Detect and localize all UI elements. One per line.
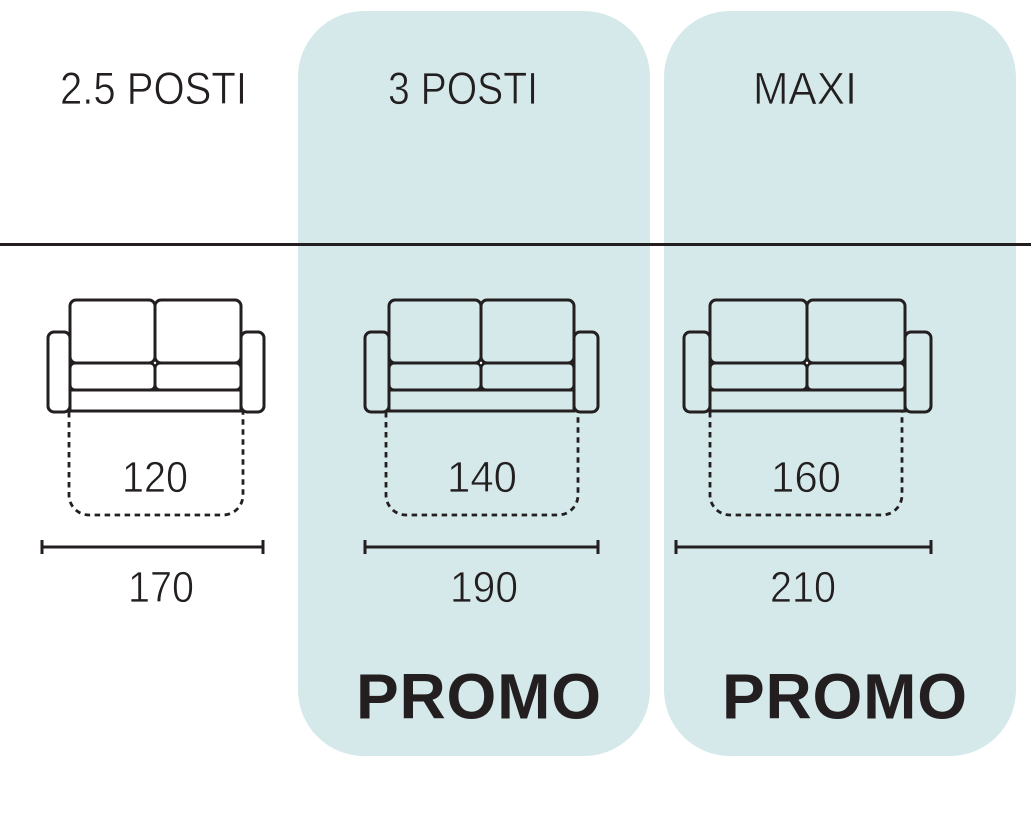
panel: 3 posti background	[298, 11, 650, 756]
icon: sofa 3 posti	[365, 300, 598, 515]
dimension line: 210	[676, 540, 931, 554]
heading: maxi: MAXI	[753, 63, 857, 114]
label: bed width 120: 120	[122, 453, 188, 502]
icon: sofa maxi	[684, 300, 931, 515]
dimension line: 190	[365, 540, 598, 554]
label: bed width 140: 140	[447, 453, 517, 502]
label: overall width 210: 210	[770, 563, 836, 612]
label: promo maxi: PROMO	[722, 660, 967, 732]
dimension line: 170	[42, 540, 263, 554]
icon: sofa 2.5 posti	[48, 300, 264, 515]
label: overall width 190: 190	[450, 563, 518, 612]
label: overall width 170: 170	[128, 563, 194, 612]
label: promo 3 posti: PROMO	[356, 660, 601, 732]
heading: 3 posti: 3 POSTI	[388, 63, 538, 114]
panel: maxi background	[664, 11, 1016, 756]
label: bed width 160: 160	[771, 453, 841, 502]
heading: 2.5 posti: 2.5 POSTI	[60, 63, 247, 114]
